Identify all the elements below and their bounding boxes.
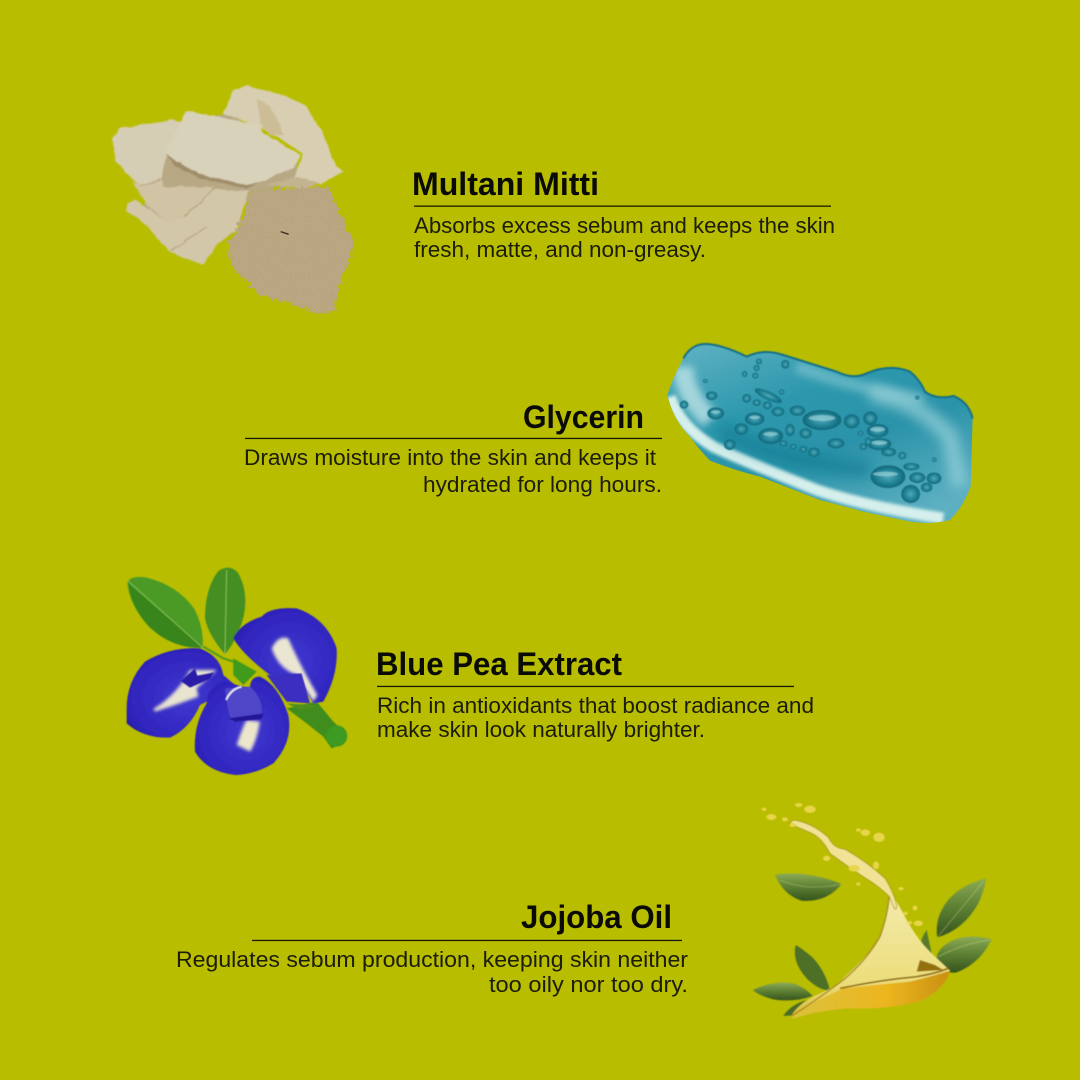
description: glycerin: hydrated for long hours. xyxy=(423,472,662,497)
icon: multani mitti clay and powder xyxy=(113,86,355,313)
panel: blue pea text xyxy=(376,646,814,742)
description: multani mitti: Absorbs excess sebum and keeps the skin xyxy=(414,213,835,238)
description: glycerin: Draws moisture into the skin and keeps it xyxy=(244,445,656,470)
icon: glycerin gel with bubbles xyxy=(667,344,973,523)
description: blue pea extract: Rich in antioxidants that boost radiance and xyxy=(377,693,814,718)
panel: jojoba oil text xyxy=(176,899,688,997)
panel: multani mitti text xyxy=(412,166,835,262)
heading: glycerin: Glycerin xyxy=(523,399,644,435)
panel: glycerin text xyxy=(244,399,662,497)
description: blue pea extract: make skin look naturally brighter. xyxy=(377,717,705,742)
heading: blue pea extract: Blue Pea Extract xyxy=(376,646,622,682)
description: jojoba oil: too oily nor too dry. xyxy=(489,972,688,997)
description: blue pea extract xyxy=(377,693,814,742)
description: glycerin xyxy=(244,445,662,497)
heading: multani mitti: Multani Mitti xyxy=(412,166,599,202)
description: multani mitti xyxy=(414,213,835,262)
heading: jojoba oil: Jojoba Oil xyxy=(521,899,672,935)
description: jojoba oil xyxy=(176,947,688,997)
description: multani mitti: fresh, matte, and non-greasy. xyxy=(414,237,706,262)
icon: blue pea flowers and leaves xyxy=(127,568,347,775)
icon: jojoba oil splash and leaves xyxy=(753,803,992,1019)
description: jojoba oil: Regulates sebum production, keeping skin neither xyxy=(176,947,688,972)
